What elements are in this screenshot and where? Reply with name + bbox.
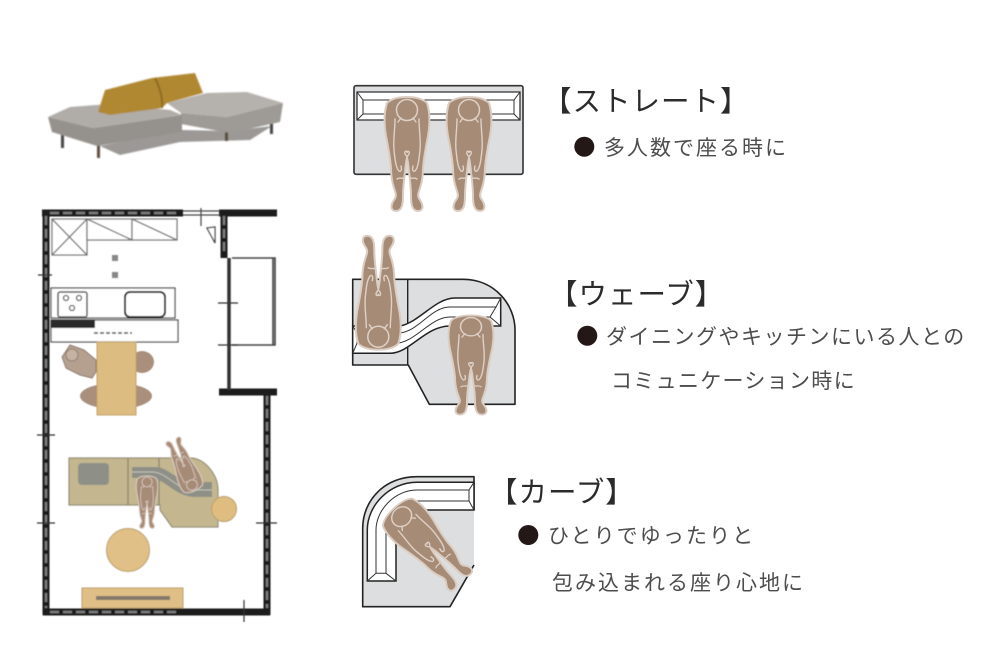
text: straight description: 多人数で座る時に [604, 137, 788, 160]
tv board [82, 588, 183, 608]
round table [106, 528, 150, 572]
bullet [518, 525, 538, 545]
living sofa [69, 458, 218, 527]
text: curve description line 2: 包み込まれる座り心地に [552, 572, 805, 595]
section: straight [543, 86, 788, 160]
text: wave description line 2: コミュニケーション時に [611, 370, 856, 393]
floor plan [37, 208, 277, 622]
text: wave description line 1: ダイニングやキッチンにいる人との [606, 326, 966, 349]
kitchen counter [51, 288, 178, 342]
photo: sofa with mustard cushion [48, 73, 283, 158]
dining chairs [130, 351, 154, 373]
walls [37, 208, 277, 622]
heading: straight: 【ストレート】 [543, 86, 750, 118]
dining table [97, 342, 136, 415]
bullet [574, 137, 594, 157]
text: curve description line 1: ひとりでゆったりと [548, 525, 755, 548]
diagram: curve sofa [363, 477, 479, 607]
diagram: wave sofa [353, 236, 515, 415]
diagram: straight sofa [354, 86, 523, 211]
living persons [136, 476, 158, 528]
heading: wave: 【ウェーブ】 [549, 279, 724, 311]
section: curve [489, 477, 805, 595]
bullet [577, 326, 597, 346]
dining person [62, 345, 96, 378]
kitchen cabinets [52, 219, 215, 255]
section: wave [549, 279, 966, 393]
heading: curve: 【カーブ】 [489, 477, 635, 509]
